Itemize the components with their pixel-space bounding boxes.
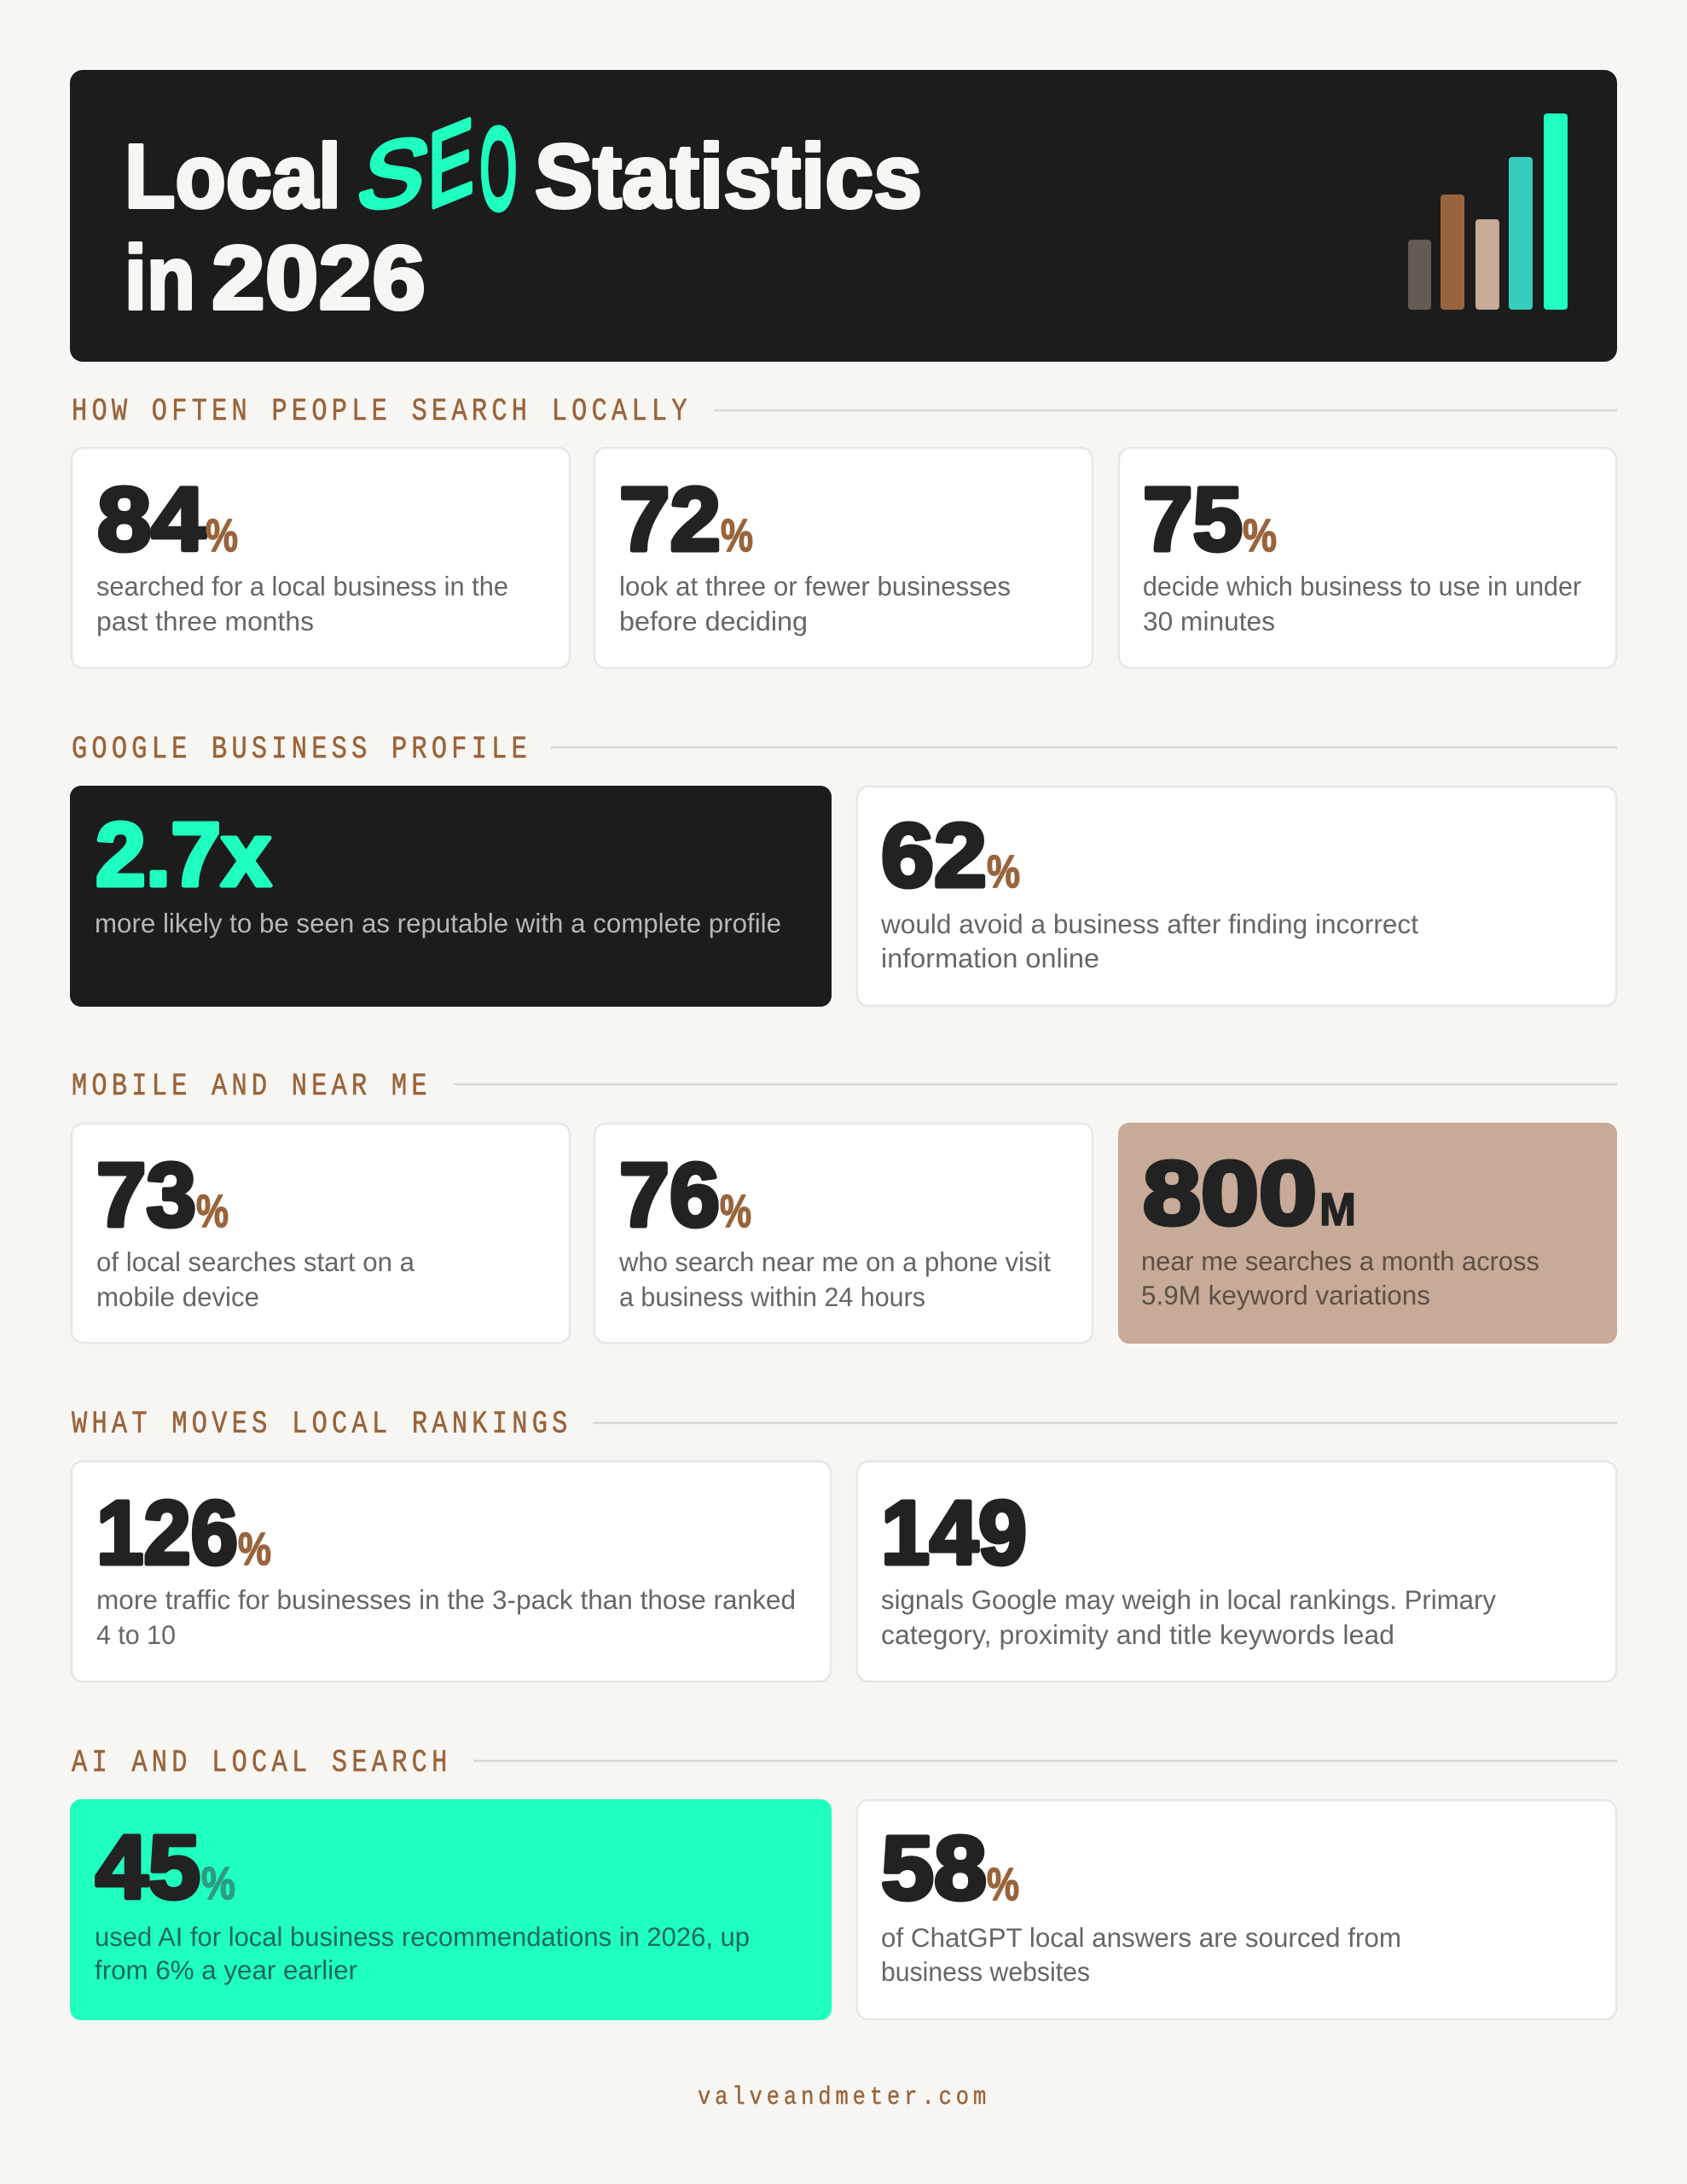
stat card: 149: signals Google may weigh in local rankings. Primary — [881, 1584, 1496, 1615]
stat card: 62%: information online — [881, 943, 1099, 973]
stat card: 62%: 62 — [881, 805, 987, 906]
section heading: HOW OFTEN PEOPLE SEARCH LOCALLY — [72, 394, 687, 430]
stat card: 73% — [72, 1124, 570, 1343]
stat card: 84% — [72, 448, 570, 668]
stat card: 76% — [594, 1124, 1093, 1343]
section: mobile and near me — [72, 1069, 1617, 1344]
stat card: 76%: % — [720, 1186, 751, 1237]
stat card: 62%: % — [987, 846, 1020, 897]
stat card: 126%: 126 — [96, 1483, 238, 1583]
stat card: 126%: 4 to 10 — [96, 1619, 176, 1650]
stat card: 72%: 72 — [619, 469, 721, 570]
stat card: 58%: of ChatGPT local answers are sourced from — [881, 1922, 1401, 1953]
stat card: 149 — [857, 1461, 1616, 1682]
section: google business profile — [70, 732, 1617, 1007]
stat card: 76%: 76 — [619, 1145, 720, 1246]
stat card: 62%: would avoid a business after finding incorrect — [880, 909, 1418, 939]
stat card: 76%: a business within 24 hours — [619, 1281, 925, 1312]
title: Local — [125, 126, 341, 227]
stat card: 800M: M — [1319, 1184, 1356, 1235]
header banner — [70, 70, 1617, 362]
title — [125, 95, 922, 328]
section: ai and local search — [70, 1745, 1617, 2020]
stat card: 2.7x: 2.7x — [96, 804, 271, 905]
title: 2026 — [212, 228, 426, 328]
stat card: 84%: searched for a local business in the — [96, 571, 508, 601]
section: what moves local rankings — [72, 1407, 1617, 1682]
stat card: 800M — [1118, 1123, 1617, 1344]
stat card: 800M: 5.9M keyword variations — [1141, 1280, 1430, 1310]
stat card: 800M: near me searches a month across — [1141, 1246, 1539, 1276]
title: O — [480, 104, 517, 233]
stat card: 62% — [857, 787, 1616, 1006]
stat card: 149: category, proximity and title keywords lead — [881, 1619, 1394, 1650]
stat card: 72%: % — [721, 510, 753, 561]
stat card: 73%: 73 — [96, 1145, 196, 1246]
footer url: valveandmeter.com — [698, 2083, 986, 2112]
stat card: 58% — [857, 1800, 1616, 2019]
stat card: 58%: % — [987, 1859, 1019, 1910]
stat card: 73%: of local searches start on a — [96, 1246, 415, 1277]
stat card: 45%: 45 — [96, 1817, 200, 1918]
stat card: 75%: 30 minutes — [1143, 606, 1275, 636]
stat card: 75%: % — [1243, 510, 1277, 561]
stat card: 45%: used AI for local business recommendations in 2026, up — [95, 1921, 750, 1952]
title: Statistics — [535, 126, 922, 227]
title: E — [428, 95, 473, 232]
stat card: 2.7x: more likely to be seen as reputable with a complete profile — [95, 908, 781, 938]
stat card: 45%: % — [201, 1858, 235, 1909]
stat card: 72%: look at three or fewer businesses — [619, 571, 1011, 601]
section heading: GOOGLE BUSINESS PROFILE — [72, 732, 527, 768]
section: how often people search locally — [72, 394, 1617, 668]
stat card: 73%: % — [196, 1186, 229, 1237]
section heading: MOBILE AND NEAR ME — [72, 1069, 427, 1105]
stat card: 149: 149 — [881, 1483, 1027, 1583]
section heading: WHAT MOVES LOCAL RANKINGS — [72, 1407, 567, 1443]
stat card: 72%: before deciding — [619, 606, 808, 636]
stat card: 2.7x — [70, 786, 832, 1007]
stat card: 58%: business websites — [881, 1956, 1090, 1987]
stat card: 800M: 800 — [1143, 1143, 1317, 1244]
stat card: 75%: decide which business to use in under — [1143, 571, 1581, 601]
stat card: 126%: more traffic for businesses in the 3-pack than those ranked — [96, 1584, 796, 1615]
stat card: 73%: mobile device — [96, 1281, 259, 1312]
stat card: 58%: 58 — [881, 1818, 987, 1919]
icon: rising bar chart — [1408, 113, 1568, 310]
stat card: 126%: % — [238, 1524, 271, 1575]
section heading: AI AND LOCAL SEARCH — [72, 1745, 447, 1781]
stat card: 84%: past three months — [96, 606, 314, 636]
stat card: 84%: % — [206, 510, 238, 561]
stat card: 126% — [72, 1461, 831, 1682]
stat card: 45% — [70, 1799, 832, 2020]
title: S — [348, 117, 440, 230]
stat card: 45%: from 6% a year earlier — [95, 1955, 357, 1985]
stat card: 75%: 75 — [1143, 469, 1243, 570]
title: in — [125, 228, 195, 328]
stat card: 76%: who search near me on a phone visit — [618, 1246, 1051, 1277]
stat card: 84%: 84 — [97, 469, 206, 570]
stat card: 75% — [1119, 448, 1616, 668]
stat card: 72% — [594, 448, 1093, 668]
